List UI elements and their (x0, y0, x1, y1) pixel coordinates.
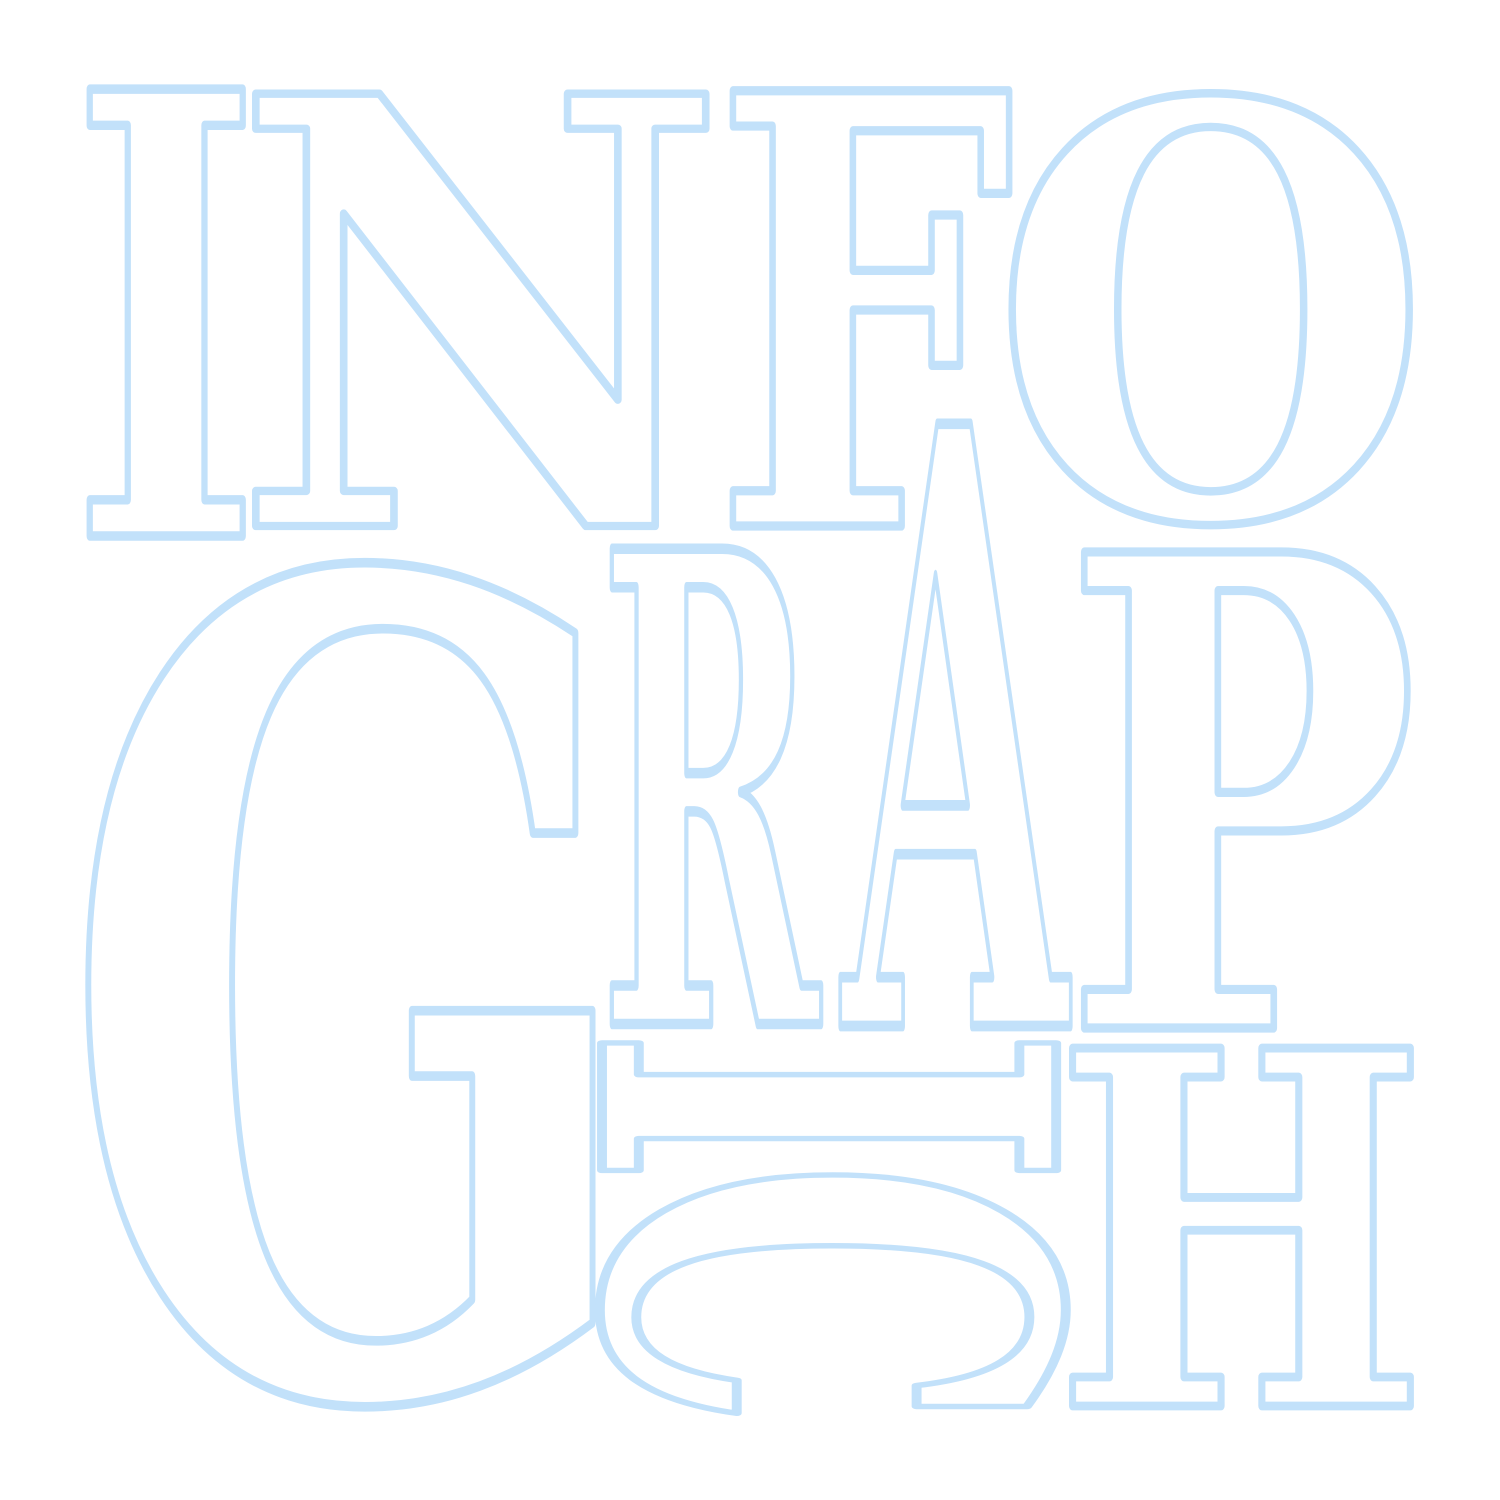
letter P: P (1062, 415, 1419, 1182)
letter I rotated: I (454, 1027, 1185, 1186)
letter C rotated: C (462, 1161, 1186, 1431)
letter A: A (838, 251, 1074, 1221)
letter O: O (991, 0, 1431, 653)
letter R: R (599, 413, 823, 1179)
